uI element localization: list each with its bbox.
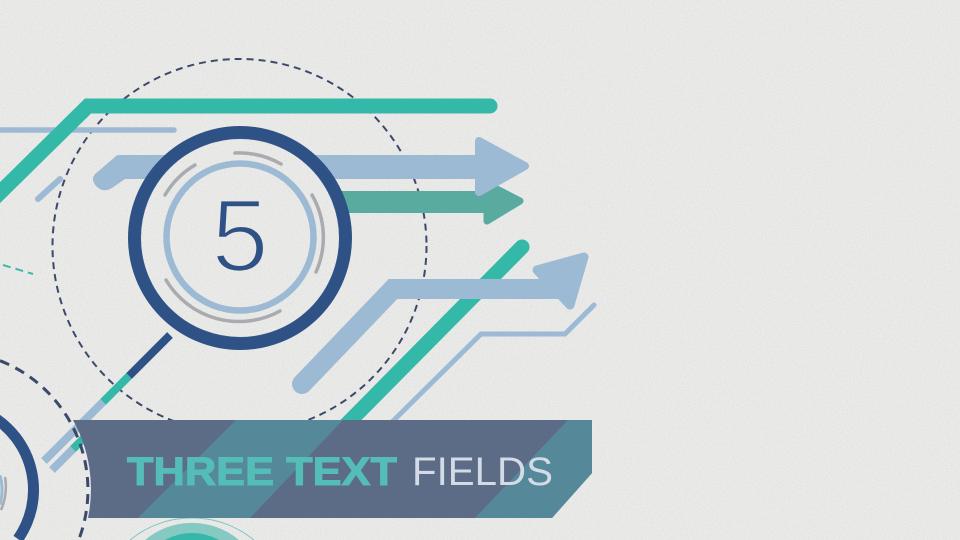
bottom teal circle <box>130 518 254 540</box>
banner title bold: THREE TEXT <box>127 450 397 494</box>
thin blue horizontal line <box>0 127 174 133</box>
large dashed circle <box>52 59 426 433</box>
small teal dashed arc <box>3 265 33 274</box>
banner teal stripe one <box>138 420 343 518</box>
gray arc segments <box>165 153 323 322</box>
second badge inner ring <box>0 475 2 505</box>
second badge gray arc <box>1 477 6 510</box>
second ring badge <box>0 415 33 539</box>
light blue lower arrow <box>302 257 584 384</box>
banner teal stripe two <box>475 420 592 518</box>
inner light blue ring <box>166 164 314 310</box>
title banner <box>73 420 592 518</box>
thin blue bent line <box>390 305 594 424</box>
bottom circle dark disc <box>165 533 219 540</box>
connector line upper <box>44 335 170 461</box>
bottom circle light disc <box>145 523 239 540</box>
green arrow <box>340 184 520 221</box>
second dashed circle <box>0 361 88 539</box>
light blue upper arrow <box>93 141 525 192</box>
connector line lower <box>52 434 88 470</box>
teal bent line <box>0 106 490 200</box>
main ring badge <box>128 126 352 350</box>
teal diagonal line <box>345 247 522 426</box>
banner title light: FIELDS <box>412 450 553 494</box>
banner background <box>73 420 592 518</box>
small blue dash <box>38 179 60 199</box>
number 5: 5 <box>211 178 269 293</box>
